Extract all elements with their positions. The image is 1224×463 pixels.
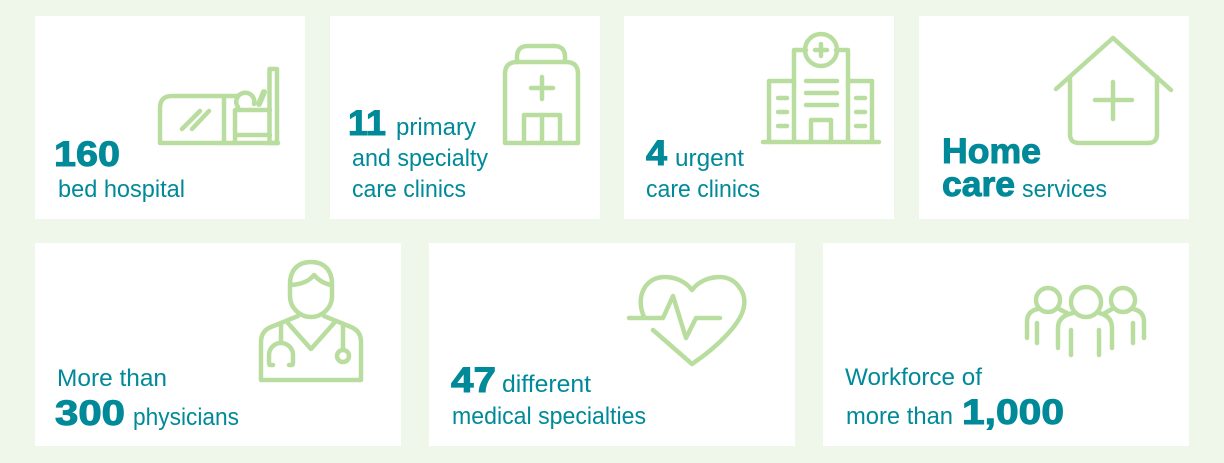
stat: 11: 11 bbox=[348, 104, 386, 143]
label: services: services bbox=[1022, 176, 1107, 203]
label: urgent care clinics bbox=[646, 145, 760, 203]
stat: 300: 300 bbox=[55, 394, 125, 433]
label: primary and specialty care clinics: primary bbox=[396, 114, 476, 141]
panel: home care services bbox=[919, 16, 1189, 219]
panel: 160 bed hospital bbox=[35, 16, 305, 219]
panel: 47 different medical specialties bbox=[429, 243, 795, 446]
icon: heart with pulse bbox=[629, 277, 744, 364]
stat: Home care: care bbox=[942, 165, 1015, 204]
label: physicians: physicians bbox=[133, 404, 239, 431]
label: bed hospital: bed hospital bbox=[58, 176, 185, 203]
label: primary and specialty care clinics: care clinics bbox=[352, 176, 466, 203]
panel: 11 primary and specialty care clinics bbox=[330, 16, 600, 219]
label: Workforce of more than bbox=[845, 364, 982, 430]
label: urgent care clinics: care clinics bbox=[646, 176, 760, 203]
icon: house with cross bbox=[1056, 38, 1171, 143]
stat: Home care bbox=[942, 132, 1041, 204]
icon: group of people bbox=[1027, 287, 1144, 355]
label: different medical specialties: different bbox=[502, 371, 591, 398]
label: primary and specialty care clinics: and specialty bbox=[352, 145, 488, 172]
icon: hospital bed bbox=[160, 69, 278, 143]
label: Workforce of more than: Workforce of bbox=[845, 364, 982, 391]
panel: more than 300 physicians bbox=[35, 243, 401, 446]
stat: 4: 4 bbox=[646, 134, 668, 173]
panel: 4 urgent care clinics bbox=[624, 16, 894, 219]
label: urgent care clinics: urgent bbox=[675, 145, 744, 172]
label: Workforce of more than: more than bbox=[846, 403, 953, 430]
icon: doctor bbox=[261, 262, 361, 380]
panel: workforce of more than 1,000 bbox=[823, 243, 1189, 446]
label: More than: More than bbox=[57, 365, 167, 392]
icon: clinic building bbox=[505, 46, 578, 143]
label: different medical specialties: medical specialties bbox=[452, 403, 646, 430]
stat: 47: 47 bbox=[451, 361, 496, 400]
stat: 160: 160 bbox=[54, 135, 120, 174]
stat: Home care: Home bbox=[942, 132, 1041, 171]
stat: 1,000: 1,000 bbox=[962, 393, 1064, 432]
label: primary and specialty care clinics bbox=[352, 114, 488, 203]
label: different medical specialties bbox=[452, 371, 646, 430]
icon: hospital with cross bbox=[763, 34, 879, 142]
